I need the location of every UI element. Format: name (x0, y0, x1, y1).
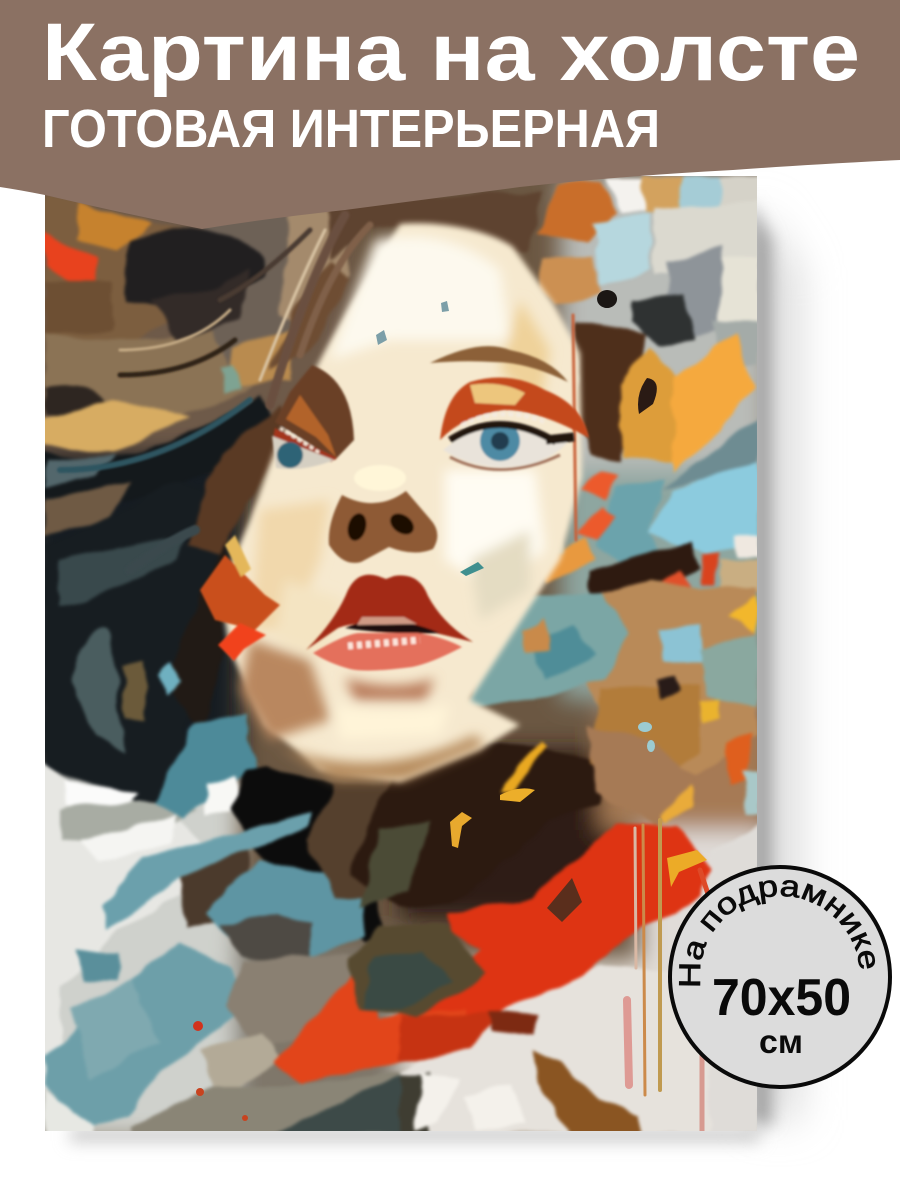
bottom white (398, 964, 713, 1131)
face: left eye (272, 365, 354, 469)
face base (220, 223, 582, 782)
right top mosaic (537, 182, 618, 243)
subtitle: ГОТОВАЯ ИНТЕРЬЕРНАЯ (42, 99, 660, 159)
face: lips (306, 575, 473, 671)
right mid mosaic (587, 580, 757, 775)
black hair band (40, 395, 270, 500)
size badge (668, 865, 892, 1089)
orange cheek patch (200, 535, 280, 661)
painting: brush-shaped colour fields (40, 176, 763, 1136)
badge: arched label: На подрамнике (678, 880, 876, 986)
lower-left white and teal (40, 760, 220, 1090)
lower brown wisps (490, 1010, 540, 1037)
face shading (240, 236, 550, 780)
face: nose (329, 465, 437, 563)
hair strands over forehead (60, 215, 576, 570)
neck (305, 783, 387, 902)
badge: unit: см (759, 1023, 803, 1060)
hair top-left (45, 196, 172, 340)
title: Картина на холсте (42, 7, 860, 98)
face: right eye (430, 346, 589, 470)
paint drips (627, 820, 710, 1131)
painting: soft underpainting (30, 170, 770, 1140)
painting on canvas (30, 170, 770, 1140)
badge: dimensions: 70x50 (712, 969, 851, 1027)
dark hair (45, 483, 225, 815)
gold and red accents (193, 290, 707, 1121)
top banner (0, 0, 900, 229)
neck-lower olive (348, 925, 488, 1015)
red sweep (424, 822, 714, 1017)
canvas drop shadow (70, 200, 800, 1142)
